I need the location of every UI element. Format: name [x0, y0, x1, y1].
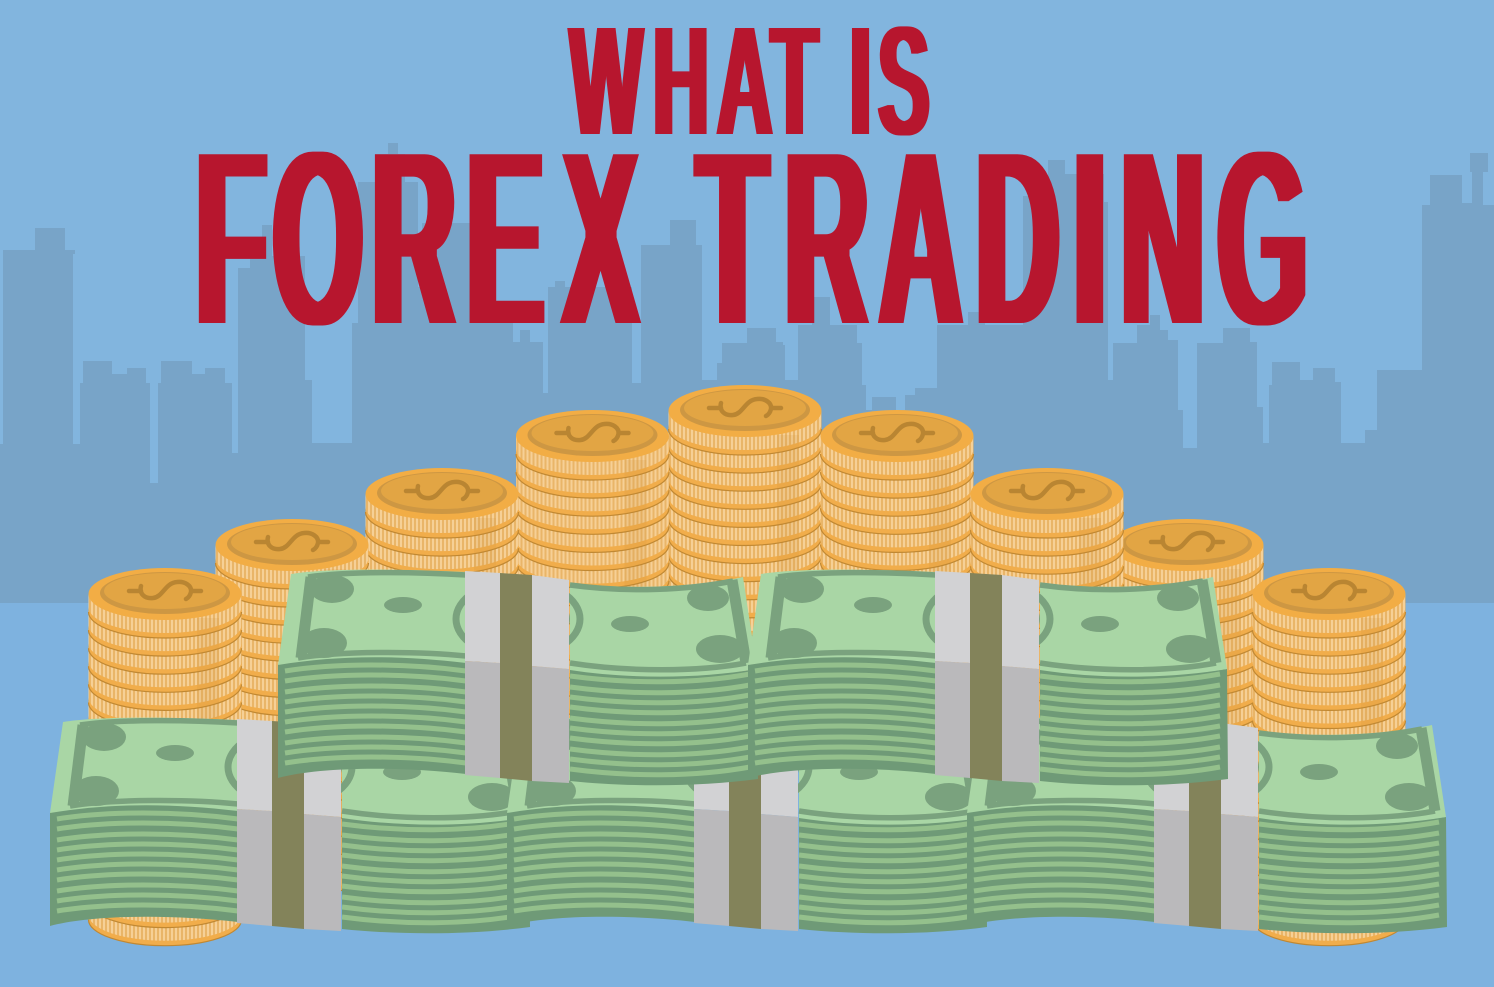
- title line: FOREX TRADING: FOREX TRADING: [196, 96, 1307, 380]
- cash bundle: bottom centre: [507, 718, 987, 933]
- cash bundle: top right: [748, 570, 1228, 785]
- banknote bundles: [50, 570, 1447, 933]
- cash bundle: bottom right: [967, 718, 1447, 933]
- coin stack: outer-middle left: [216, 519, 368, 897]
- title: [196, 0, 1307, 380]
- gold coin stacks: [88, 385, 1406, 946]
- coin stack: middle left: [366, 468, 518, 846]
- coin stack: far left: [88, 568, 242, 946]
- coin stack: inner right: [820, 410, 974, 788]
- water band: [0, 603, 1494, 987]
- coin stack: middle right: [970, 468, 1124, 846]
- cash bundle: bottom left: [50, 718, 530, 933]
- coin stack: outer-middle right: [1110, 519, 1264, 897]
- city skyline silhouette: [0, 143, 1494, 603]
- cash bundle: top left: [278, 570, 758, 785]
- coin stack: inner left: [516, 410, 669, 788]
- coin stack: far right: [1252, 568, 1406, 946]
- coin stack: centre: [668, 385, 822, 763]
